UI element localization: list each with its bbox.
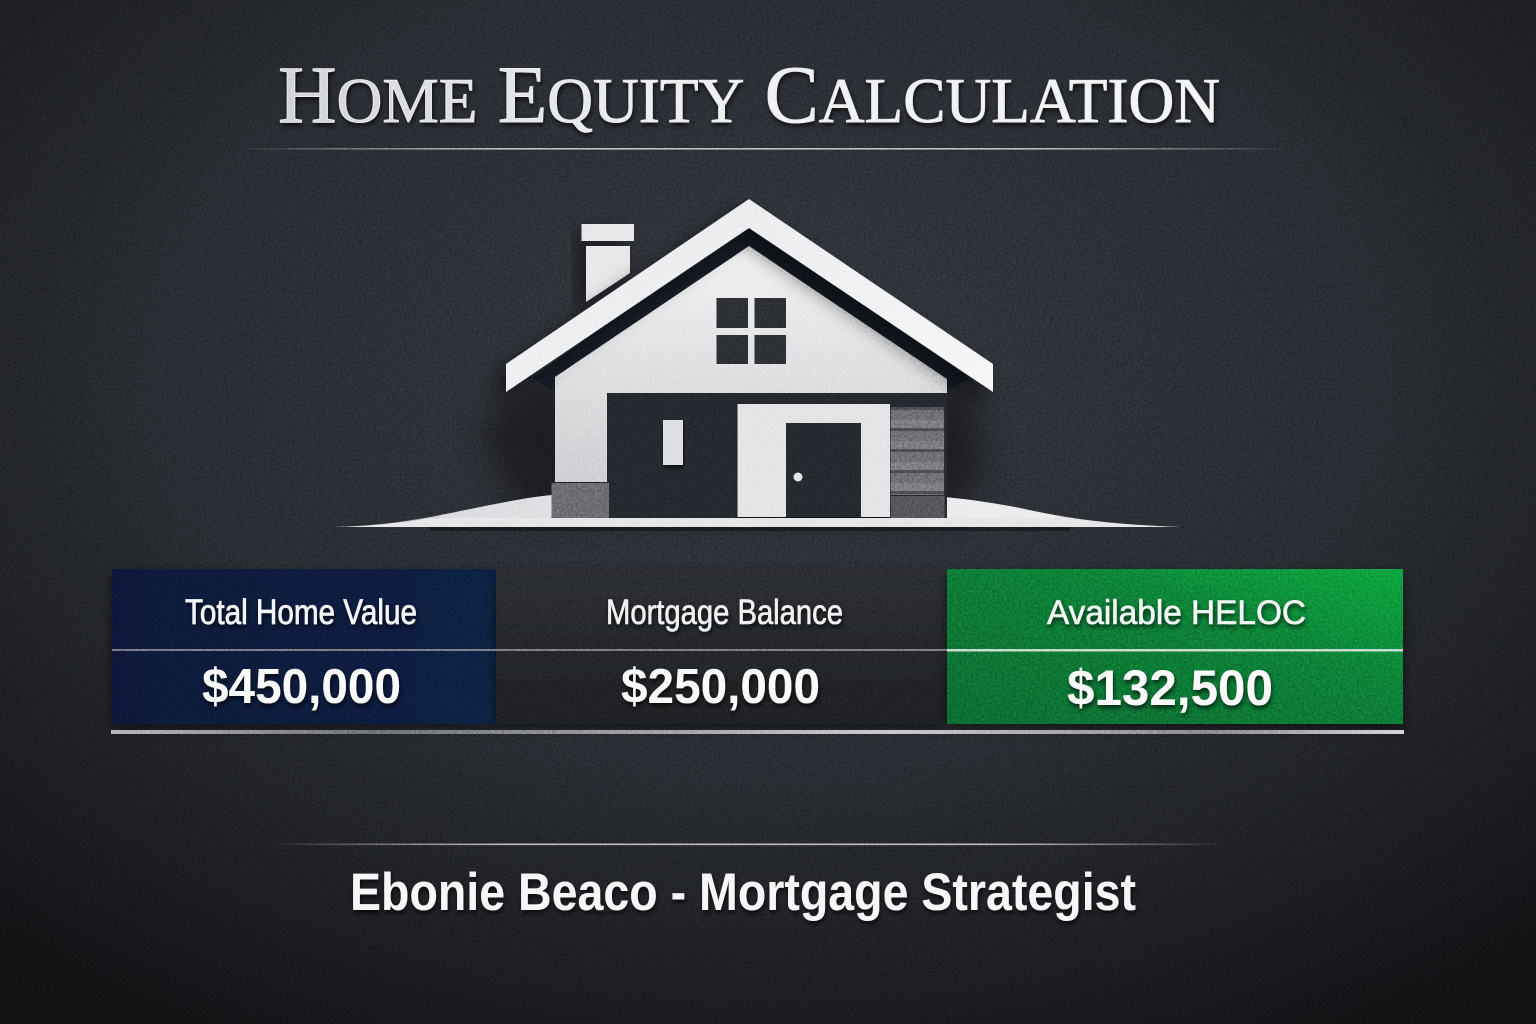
value: mortgage balance: $250,000 bbox=[621, 660, 820, 714]
panel: total home value bbox=[112, 569, 496, 724]
door bbox=[786, 423, 861, 517]
garage siding bbox=[890, 407, 944, 495]
value: total home value: $450,000 bbox=[202, 660, 401, 714]
title: Home Equity Calculation bbox=[278, 40, 1220, 142]
equity table bbox=[111, 569, 1404, 734]
panel: available heloc bbox=[947, 569, 1403, 724]
roof bbox=[506, 199, 993, 392]
ground slab bbox=[335, 518, 1180, 527]
attic window bbox=[716, 298, 786, 364]
small side window bbox=[663, 420, 683, 465]
chimney bbox=[582, 224, 634, 302]
door frame bbox=[738, 404, 890, 517]
front gable body bbox=[555, 246, 947, 482]
label: total home value: Total Home Value bbox=[185, 593, 417, 632]
house walls bbox=[600, 385, 947, 518]
value: available heloc: $132,500 bbox=[1067, 660, 1273, 716]
cast shadow bbox=[480, 380, 985, 515]
ground hill bbox=[335, 495, 1180, 527]
panel: mortgage balance bbox=[496, 569, 947, 724]
footer credit: Ebonie Beaco - Mortgage Strategist bbox=[350, 863, 1136, 922]
icon: house bbox=[335, 199, 1180, 531]
label: mortgage balance: Mortgage Balance bbox=[606, 593, 843, 632]
door knob bbox=[794, 472, 802, 482]
siding base bbox=[890, 496, 944, 518]
label: available heloc: Available HELOC bbox=[1047, 594, 1306, 632]
dark roof underside bbox=[532, 222, 969, 392]
pillar base bbox=[552, 483, 609, 518]
